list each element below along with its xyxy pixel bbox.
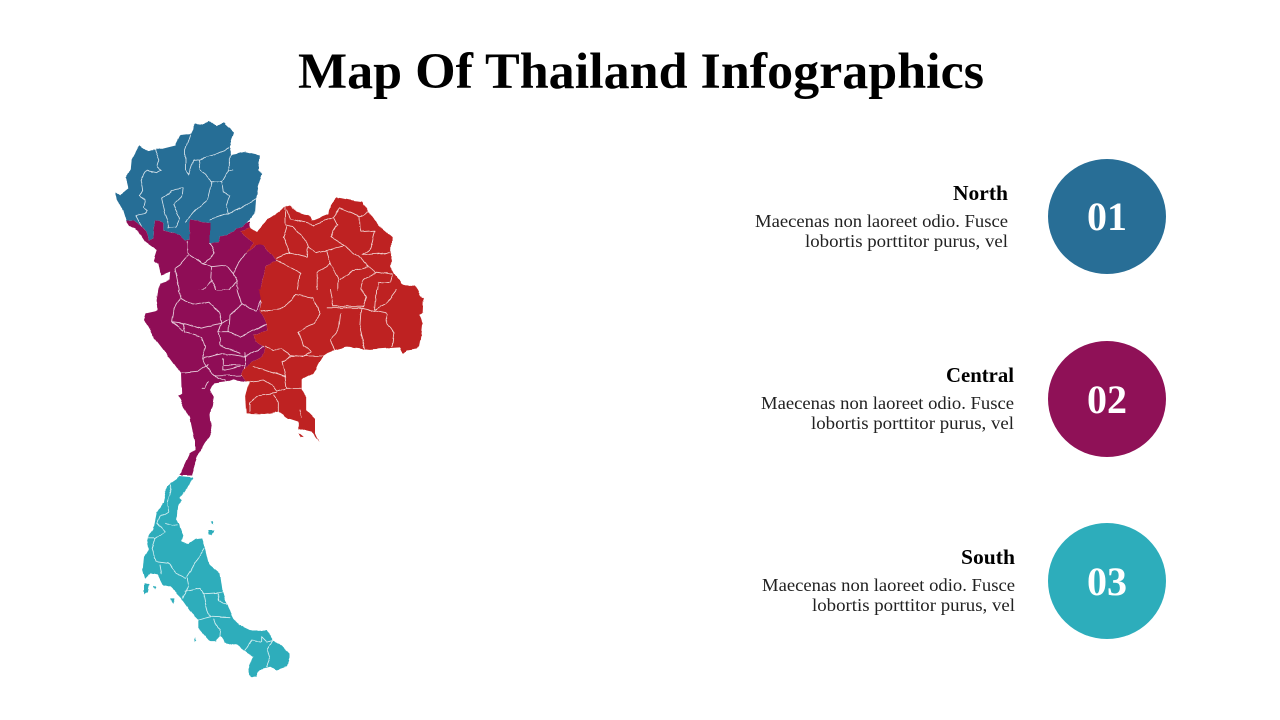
map region: south <box>143 476 290 677</box>
badge: 02 <box>1048 341 1166 457</box>
description: Central: lobortis porttitor purus, vel <box>811 413 1014 433</box>
description: South: lobortis porttitor purus, vel <box>812 595 1015 615</box>
map region: northeast and east <box>240 197 423 443</box>
description: North: lobortis porttitor purus, vel <box>805 231 1008 251</box>
description: Central <box>761 393 1014 433</box>
badge: 02: 02 <box>1087 377 1127 422</box>
description: South <box>762 575 1015 615</box>
heading: North: North <box>953 181 1008 205</box>
heading: Central: Central <box>946 363 1014 387</box>
item 01: North <box>755 159 1166 274</box>
heading: South: South <box>961 545 1015 569</box>
description: South: Maecenas non laoreet odio. Fusce <box>762 575 1015 595</box>
map region: central <box>126 220 277 475</box>
badge: 03: 03 <box>1087 559 1127 604</box>
description: Central: Maecenas non laoreet odio. Fusce <box>761 393 1014 413</box>
item 03: South <box>762 523 1166 639</box>
title: Map Of Thailand Infographics <box>298 44 984 100</box>
map of Thailand <box>115 121 423 677</box>
description: North <box>755 211 1008 251</box>
badge: 01 <box>1048 159 1166 274</box>
badge: 03 <box>1048 523 1166 639</box>
map region: north <box>115 121 263 243</box>
description: North: Maecenas non laoreet odio. Fusce <box>755 211 1008 231</box>
badge: 01: 01 <box>1087 194 1127 239</box>
item 02: Central <box>761 341 1166 457</box>
